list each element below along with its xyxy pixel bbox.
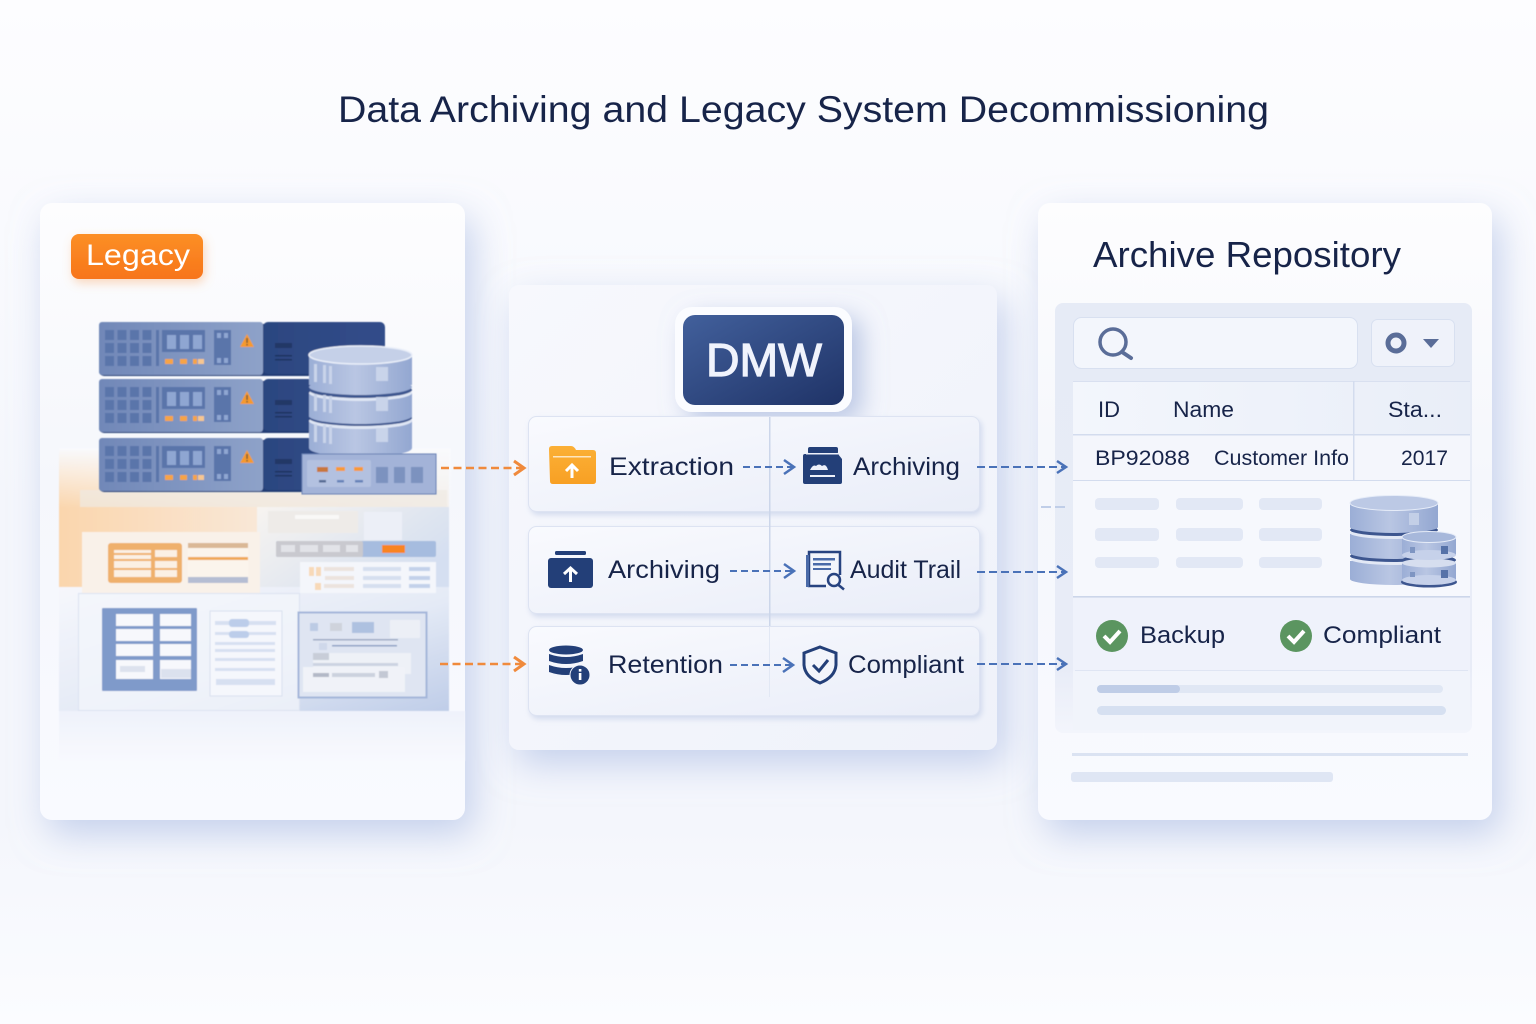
document — [210, 611, 282, 696]
row: Retention to Compliant: Compliant — [848, 651, 964, 679]
icon: archive box — [803, 447, 842, 484]
arrow — [730, 658, 793, 672]
arrow: legacy screens to retention — [440, 657, 524, 671]
data table: Sta... — [1388, 397, 1442, 422]
icon: audit document — [806, 552, 844, 590]
panel: legacy — [40, 203, 465, 820]
panel: DMW process — [509, 285, 997, 750]
icon: shield check — [804, 647, 836, 683]
arrow — [743, 460, 794, 474]
arrow: archiving to repository — [977, 461, 1066, 473]
illustration: server rack — [99, 322, 436, 494]
data table: BP92088 — [1095, 447, 1190, 470]
icon: database info — [549, 646, 590, 685]
row: Extraction to Archiving: Archiving — [853, 453, 960, 481]
footer placeholders — [1071, 753, 1468, 782]
progress bars — [1073, 671, 1470, 730]
small upper drum — [1402, 532, 1456, 578]
status row: Backup — [1140, 622, 1225, 649]
row: Extraction to Archiving: Extraction — [609, 453, 734, 481]
data table: ID — [1098, 397, 1120, 422]
placeholder records — [1073, 481, 1470, 598]
icon: check — [1096, 620, 1128, 652]
small lower drum — [1401, 555, 1457, 588]
badge: DMW: DMW — [706, 334, 823, 386]
arrow — [730, 564, 794, 578]
arrow: legacy servers to extraction — [441, 461, 524, 475]
row: Archiving to Audit Trail: Archiving — [608, 556, 720, 584]
row: Retention to Compliant — [528, 614, 980, 716]
card: lower screens — [78, 594, 426, 710]
icon: check — [1280, 620, 1312, 652]
status row — [1073, 598, 1470, 671]
title: Data Archiving and Legacy System Decommissioning — [338, 89, 1269, 130]
repository window background — [1055, 303, 1472, 733]
form window — [298, 612, 426, 698]
row: Retention to Compliant: Retention — [608, 651, 723, 679]
data table: Name — [1173, 397, 1234, 422]
badge: DMW — [675, 307, 852, 412]
data table: 2017 — [1401, 447, 1448, 470]
illustration: faded legacy screens — [59, 448, 465, 761]
badge: Legacy: Legacy — [86, 239, 190, 272]
data table — [1073, 381, 1470, 482]
blue table — [102, 608, 197, 691]
panel: Archive Repository — [1038, 203, 1492, 820]
row: Archiving to Audit Trail: Audit Trail — [850, 556, 961, 584]
status row: Compliant — [1323, 622, 1441, 649]
badge: Legacy — [71, 234, 203, 279]
filter dropdown — [1372, 320, 1454, 366]
arrow: audit trail to repository — [977, 566, 1066, 578]
icon: folder upload — [549, 446, 596, 484]
heading: Archive Repository — [1093, 234, 1401, 275]
icon: archive upload — [548, 551, 593, 588]
arrow: compliant to repository — [977, 658, 1066, 670]
server unit — [302, 454, 436, 494]
search box — [1074, 318, 1358, 368]
icon: database stack — [1350, 496, 1457, 588]
row: Archiving to Audit Trail — [528, 512, 980, 614]
row: Extraction to Archiving — [528, 416, 980, 512]
faint connector — [1041, 506, 1066, 508]
card: orange tables — [82, 532, 260, 593]
card: toolbar and list — [276, 541, 436, 593]
icon: database cylinder — [309, 346, 412, 457]
data table: Customer Info — [1214, 447, 1349, 470]
